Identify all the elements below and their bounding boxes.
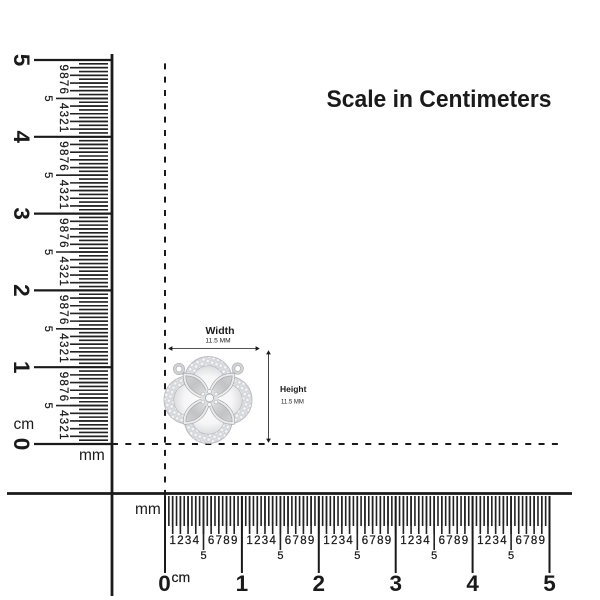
pave-set outer lobes [164, 357, 252, 443]
vertical millimetre numbers: 7 [57, 157, 69, 163]
vertical millimetre numbers: 2 [57, 272, 69, 278]
vertical centimetre numbers: 1 [9, 361, 34, 373]
height dimension [267, 351, 307, 442]
horizontal millimetre numbers: 9 [308, 535, 314, 547]
horizontal millimetre numbers: 8 [377, 535, 384, 547]
vertical millimetre numbers: 1 [57, 433, 69, 440]
horizontal millimetre numbers: 3 [185, 535, 191, 547]
width label: Width [205, 325, 235, 337]
horizontal five-millimetre numbers: 5 [508, 550, 514, 562]
centre diamond cluster [201, 390, 218, 406]
horizontal millimetre numbers: 1 [323, 535, 330, 547]
horizontal five-millimetre numbers: 5 [200, 550, 207, 562]
horizontal millimetre numbers: 6 [208, 535, 214, 547]
horizontal millimetre numbers: 4 [193, 535, 200, 547]
horizontal millimetre numbers: 4 [500, 535, 507, 547]
vertical cm unit: cm [14, 416, 34, 433]
horizontal half-millimetre ticks [164, 496, 550, 526]
vertical millimetre numbers: 4 [57, 256, 69, 263]
vertical millimetre numbers: 3 [57, 111, 69, 117]
horizontal millimetre numbers: 1 [477, 535, 484, 547]
vertical millimetre numbers: 3 [57, 264, 69, 271]
horizontal mm unit: mm [135, 501, 161, 518]
vertical millimetre numbers [57, 64, 69, 440]
vertical five-millimetre numbers: 5 [42, 95, 54, 101]
vertical five-millimetre numbers: 5 [42, 249, 54, 255]
vertical millimetre numbers: 6 [57, 241, 69, 248]
horizontal millimetre numbers: 6 [362, 535, 368, 547]
height value: 11.5 MM [281, 400, 304, 406]
vertical millimetre numbers: 6 [57, 164, 69, 171]
vertical millimetre numbers: 2 [57, 118, 69, 125]
vertical centimetre numbers: 2 [9, 284, 34, 297]
vertical millimetre numbers: 7 [57, 80, 69, 86]
vertical millimetre numbers: 9 [57, 64, 69, 71]
vertical millimetre numbers: 3 [57, 418, 69, 424]
vertical millimetre numbers: 2 [57, 195, 69, 201]
horizontal millimetre numbers: 8 [300, 535, 307, 547]
vertical millimetre numbers: 8 [57, 379, 69, 386]
vertical half-millimetre ticks [79, 59, 108, 445]
vertical centimetre numbers: 4 [9, 131, 34, 144]
vertical millimetre numbers: 4 [57, 103, 69, 110]
horizontal centimetre numbers: 5 [543, 571, 556, 596]
vertical millimetre numbers: 9 [57, 141, 69, 148]
vertical millimetre numbers: 4 [57, 180, 69, 187]
vertical centimetre numbers [9, 54, 34, 450]
width dimension [169, 325, 259, 350]
horizontal millimetre numbers: 8 [223, 535, 230, 547]
vertical millimetre numbers: 4 [57, 333, 69, 340]
horizontal centimetre numbers: 1 [236, 571, 248, 596]
height label: Height [280, 384, 307, 394]
dashed guide lines [112, 58, 560, 497]
horizontal millimetre numbers: 6 [285, 535, 291, 547]
title: Scale in Centimeters [326, 86, 552, 113]
height arrow [267, 351, 270, 442]
vertical ruler [9, 54, 112, 596]
horizontal millimetre numbers: 3 [416, 535, 422, 547]
horizontal millimetre numbers: 2 [408, 535, 414, 547]
horizontal millimetre numbers: 9 [539, 535, 545, 547]
vertical millimetre numbers: 8 [57, 72, 69, 79]
horizontal millimetre numbers: 6 [515, 535, 522, 547]
horizontal millimetre numbers: 7 [369, 535, 376, 547]
vertical millimetre numbers: 3 [57, 187, 69, 194]
horizontal millimetre numbers: 4 [346, 535, 353, 547]
pendant [164, 357, 252, 443]
horizontal millimetre numbers: 3 [492, 535, 499, 547]
vertical millimetre numbers: 8 [57, 226, 69, 232]
horizontal millimetre numbers: 4 [423, 535, 430, 547]
vertical millimetre numbers: 9 [57, 372, 69, 378]
horizontal centimetre numbers: 2 [313, 571, 325, 596]
vertical millimetre numbers: 2 [57, 349, 69, 355]
vertical centimetre numbers: 0 [9, 438, 34, 450]
width arrow [169, 347, 259, 350]
horizontal millimetre numbers: 2 [485, 535, 491, 547]
horizontal millimetre numbers: 1 [246, 535, 253, 547]
horizontal millimetre numbers: 1 [400, 535, 407, 547]
vertical millimetre numbers: 9 [57, 295, 69, 301]
pearl inner lobes [174, 366, 242, 434]
vertical five-millimetre numbers: 5 [42, 172, 54, 178]
horizontal millimetre numbers: 8 [454, 535, 460, 547]
vertical millimetre numbers: 3 [57, 341, 69, 347]
vertical millimetre numbers: 1 [57, 279, 69, 286]
vertical millimetre numbers: 6 [57, 395, 69, 401]
horizontal five-millimetre numbers [200, 550, 514, 562]
vertical millimetre numbers: 1 [57, 126, 69, 132]
horizontal axis line [7, 492, 572, 495]
horizontal centimetre numbers: 4 [466, 571, 479, 596]
vertical half-centimetre ticks [56, 98, 108, 406]
horizontal five-millimetre numbers: 5 [354, 550, 360, 562]
horizontal ruler [7, 494, 572, 596]
horizontal half-centimetre ticks [204, 496, 511, 550]
horizontal centimetre numbers: 0 [158, 571, 171, 596]
vertical millimetre numbers: 6 [57, 318, 69, 324]
vertical millimetre numbers: 4 [57, 410, 69, 417]
horizontal millimetre numbers: 7 [216, 535, 222, 547]
vertical five-millimetre numbers: 5 [42, 326, 54, 332]
horizontal millimetre numbers: 2 [331, 535, 337, 547]
vertical millimetre numbers: 8 [57, 303, 69, 309]
vertical millimetre ticks [70, 59, 108, 445]
horizontal millimetre numbers: 9 [231, 535, 237, 547]
vertical mm unit: mm [79, 447, 105, 464]
horizontal millimetre numbers: 7 [523, 535, 530, 547]
vertical millimetre numbers: 7 [57, 387, 69, 393]
vertical millimetre numbers: 1 [57, 203, 69, 209]
vertical centimetre ticks [34, 60, 111, 444]
horizontal millimetre numbers: 3 [262, 535, 268, 547]
horizontal millimetre numbers: 3 [339, 535, 345, 547]
horizontal millimetre ticks [164, 496, 550, 534]
vertical millimetre numbers: 2 [57, 425, 69, 432]
horizontal five-millimetre numbers: 5 [277, 550, 283, 562]
horizontal millimetre numbers [169, 535, 545, 547]
vertical millimetre numbers: 7 [57, 233, 69, 240]
vertical millimetre numbers: 9 [57, 218, 69, 225]
horizontal millimetre numbers: 2 [254, 535, 261, 547]
vertical centimetre numbers: 3 [9, 207, 34, 220]
horizontal centimetre ticks [165, 496, 550, 573]
vertical millimetre numbers: 8 [57, 149, 69, 155]
horizontal millimetre numbers: 7 [292, 535, 299, 547]
horizontal millimetre numbers: 8 [531, 535, 537, 547]
vertical millimetre numbers: 1 [57, 356, 69, 363]
vertical millimetre numbers: 7 [57, 310, 69, 317]
vertical millimetre numbers: 6 [57, 87, 69, 94]
horizontal millimetre numbers: 9 [462, 535, 468, 547]
horizontal cm unit: cm [172, 569, 190, 585]
horizontal millimetre numbers: 7 [446, 535, 453, 547]
horizontal millimetre numbers: 9 [385, 535, 391, 547]
horizontal centimetre numbers [158, 571, 556, 596]
pendant loops [175, 364, 242, 376]
vertical axis line [111, 54, 113, 596]
horizontal centimetre numbers: 3 [389, 571, 402, 596]
horizontal millimetre numbers: 1 [169, 535, 176, 547]
vertical five-millimetre numbers [42, 95, 54, 409]
horizontal millimetre numbers: 4 [269, 535, 276, 547]
vertical centimetre numbers: 5 [9, 54, 34, 66]
width value: 11.5 MM [205, 338, 231, 344]
petals [184, 374, 234, 423]
vertical five-millimetre numbers: 5 [42, 403, 54, 409]
horizontal millimetre numbers: 6 [439, 535, 445, 547]
horizontal five-millimetre numbers: 5 [431, 550, 437, 562]
horizontal millimetre numbers: 2 [177, 535, 184, 547]
